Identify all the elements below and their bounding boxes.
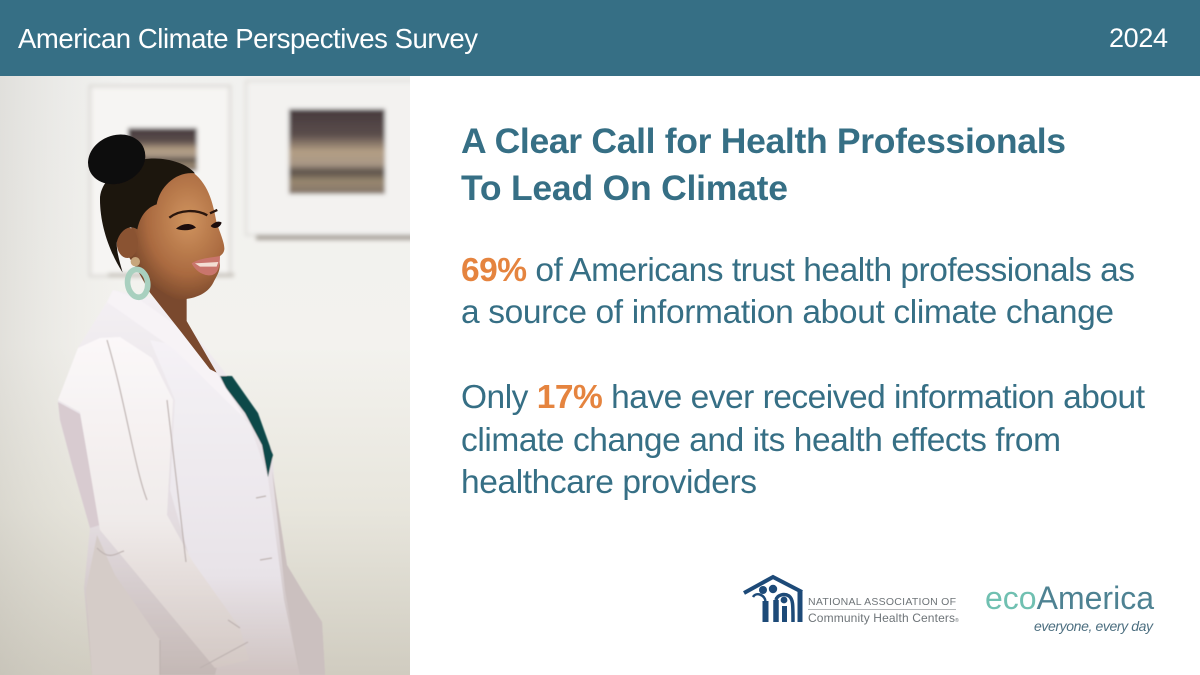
text block: only 17 percent received: healthcare providers xyxy=(461,464,757,501)
sleeve xyxy=(58,338,228,668)
back flap shading xyxy=(272,470,325,675)
heading: A Clear Call for Health Professionals xyxy=(461,121,1066,161)
lips xyxy=(192,256,220,275)
ear xyxy=(116,228,135,258)
text block: 69 percent trust: a source of information about climate change xyxy=(461,294,1114,331)
text block: 69 percent trust: 69% of Americans trust health professionals as xyxy=(461,252,1135,289)
logo: National Association of Community Health Centers: Community Health Centers xyxy=(808,611,955,625)
icon: house with people xyxy=(744,577,802,622)
collar and lapel xyxy=(186,354,243,416)
lilac under-sleeve band xyxy=(58,402,100,528)
hair xyxy=(100,158,195,273)
front panel xyxy=(170,424,300,674)
logo: National Association of Community Health Centers: ® xyxy=(955,617,959,624)
earring xyxy=(131,257,140,266)
organization name: NATIONAL ASSOCIATION OF xyxy=(808,596,956,608)
hair bun xyxy=(88,134,146,184)
text block: only 17 percent received xyxy=(461,379,1146,501)
white coat xyxy=(58,290,325,675)
coat fold lines xyxy=(97,340,272,675)
photo: health professional in white coat xyxy=(0,76,421,675)
survey name: American Climate Perspectives Survey xyxy=(18,23,478,54)
framed picture: left background xyxy=(90,86,234,277)
logo: National Association of Community Health Centers xyxy=(744,577,959,625)
lower skirt xyxy=(86,535,160,675)
text block: 69 percent trust xyxy=(461,252,1135,331)
header bar xyxy=(0,0,1200,76)
green blouse xyxy=(220,376,273,477)
neck xyxy=(138,272,216,372)
neck and head xyxy=(80,126,224,373)
framed picture: right background xyxy=(246,81,421,240)
text block: only 17 percent received: climate change and its health effects from xyxy=(461,422,1061,459)
logo: ecoAmerica xyxy=(985,580,1154,634)
year: 2024 xyxy=(1109,23,1168,53)
logo: ecoAmerica: ecoAmerica xyxy=(985,580,1154,616)
eyebrow and eyes xyxy=(169,210,217,218)
woman figure xyxy=(58,126,325,675)
heading xyxy=(461,121,1066,208)
face xyxy=(128,172,224,299)
heading: To Lead On Climate xyxy=(461,168,788,208)
logo: ecoAmerica: everyone, every day xyxy=(1034,618,1154,634)
text block: only 17 percent received: Only 17% have ever received information about xyxy=(461,379,1146,416)
